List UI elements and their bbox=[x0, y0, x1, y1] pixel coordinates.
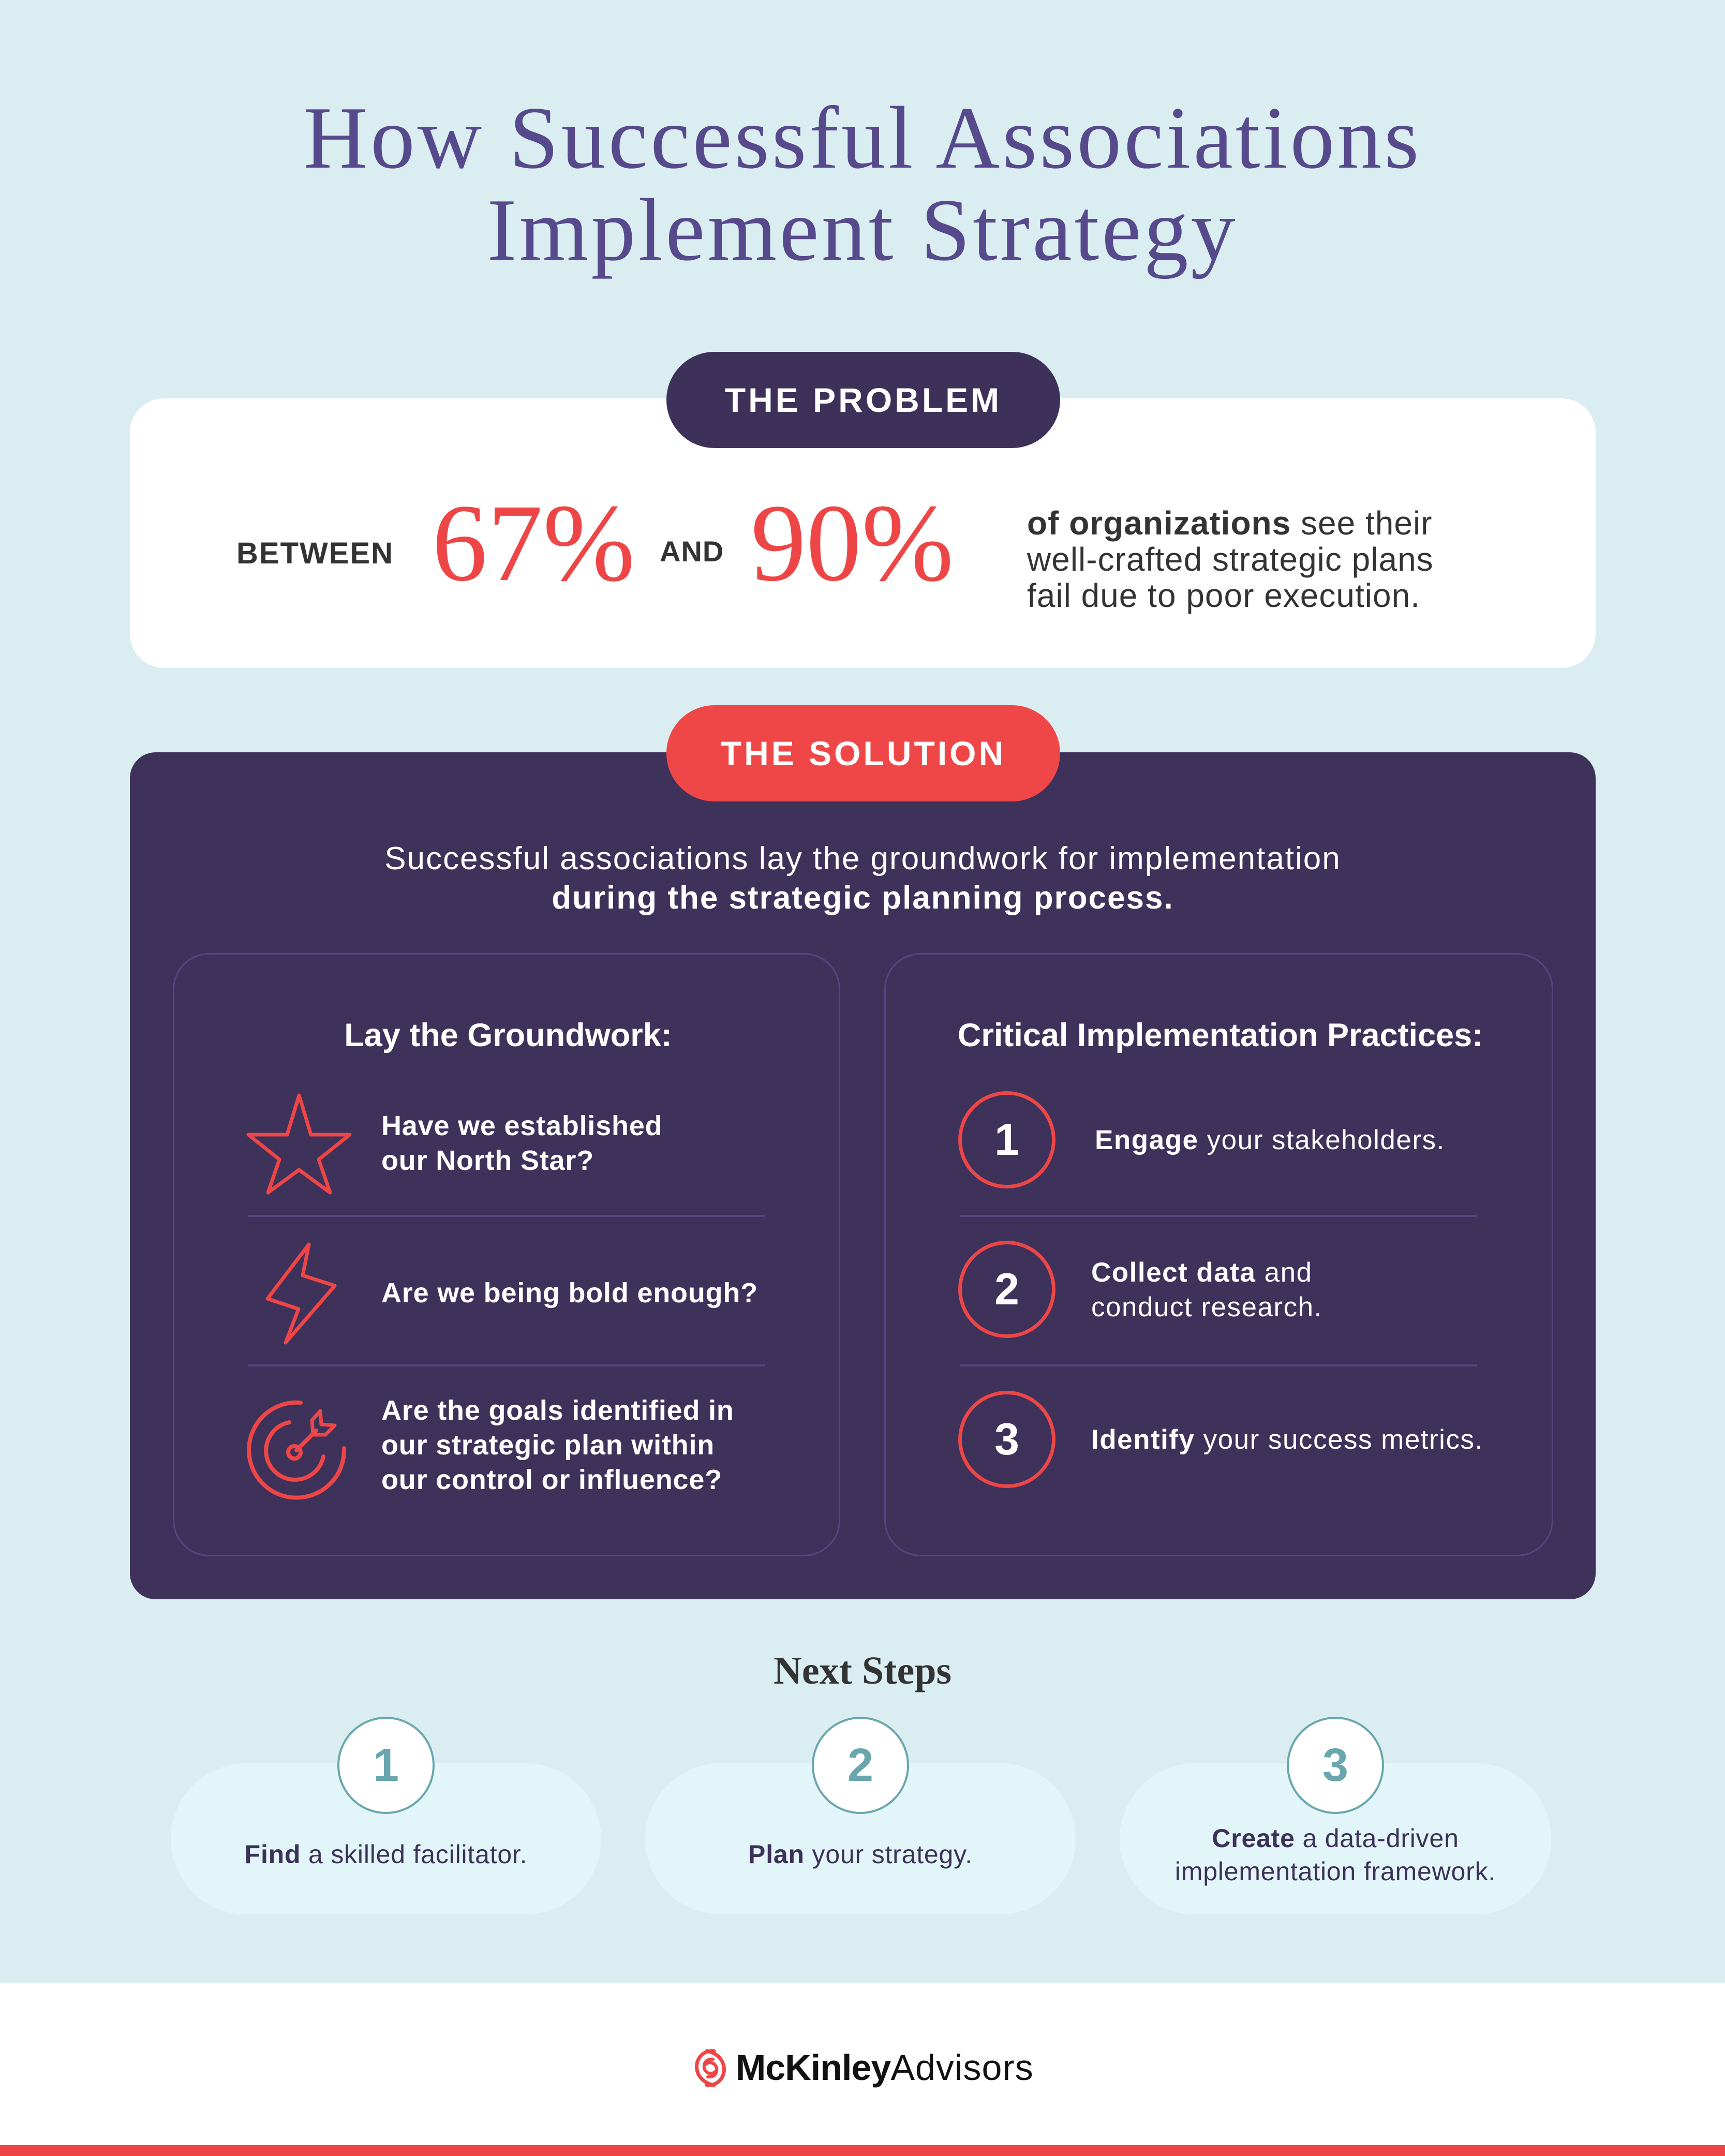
pill: step 2 bbox=[645, 1763, 1076, 1914]
heading: next steps: Next Steps bbox=[774, 1649, 951, 1692]
solution intro text: Successful associations lay the groundwork for implementation bbox=[384, 841, 1341, 876]
panel: lay the groundwork bbox=[173, 953, 840, 1556]
badge: the problem: THE PROBLEM bbox=[725, 381, 1002, 419]
number circle: step 3 bbox=[1287, 1717, 1384, 1814]
text: north star question bbox=[381, 1110, 662, 1176]
text: goals question bbox=[381, 1395, 734, 1495]
footer bbox=[0, 1983, 1725, 2156]
badge: the problem bbox=[666, 352, 1060, 448]
panel: the solution bbox=[130, 752, 1596, 1599]
number circle 1 bbox=[958, 1091, 1055, 1188]
text: goals question: our control or influence? bbox=[381, 1464, 722, 1495]
text: goals question: our strategic plan within bbox=[381, 1430, 715, 1461]
text: engage: Engage your stakeholders. bbox=[1095, 1125, 1445, 1155]
title: How Successful Associations bbox=[304, 89, 1421, 187]
icon: swirl bbox=[693, 2049, 727, 2087]
label: and: AND bbox=[660, 535, 724, 568]
stat: 67%: 67% bbox=[432, 482, 635, 604]
number circle: step 3: 3 bbox=[1322, 1739, 1348, 1791]
item: goals within control bbox=[247, 1395, 734, 1500]
icon: target bbox=[247, 1400, 347, 1500]
text: identify: Identify your success metrics. bbox=[1091, 1424, 1483, 1455]
panel: the problem bbox=[130, 398, 1596, 668]
item: bold enough bbox=[266, 1243, 758, 1344]
title: Implement Strategy bbox=[487, 181, 1238, 279]
number circle 3 bbox=[958, 1391, 1055, 1488]
item: north star bbox=[246, 1094, 662, 1194]
icon: star bbox=[246, 1094, 352, 1194]
label: between: BETWEEN bbox=[236, 537, 394, 570]
heading: lay the groundwork: Lay the Groundwork: bbox=[344, 1017, 672, 1053]
logo bbox=[694, 2047, 1034, 2088]
practice 1 bbox=[958, 1091, 1445, 1188]
number circle 2 bbox=[958, 1241, 1055, 1338]
logo wordmark: McKinleyAdvisors bbox=[736, 2047, 1034, 2088]
text: bold enough question: Are we being bold enough? bbox=[381, 1277, 758, 1309]
pill: step 3 bbox=[1120, 1763, 1551, 1914]
step 1 bbox=[245, 1717, 527, 1869]
text: step 3: Create a data-driven bbox=[1212, 1824, 1459, 1853]
text: step 3 bbox=[1175, 1824, 1496, 1886]
badge: the solution: THE SOLUTION bbox=[721, 734, 1006, 772]
stat: 90%: 90% bbox=[751, 482, 954, 604]
panel: critical implementation practices bbox=[884, 953, 1553, 1556]
solution intro text bbox=[384, 841, 1341, 916]
badge: the solution bbox=[666, 705, 1060, 801]
text: step 2: Plan your strategy. bbox=[748, 1840, 973, 1869]
practice 2 bbox=[958, 1241, 1322, 1338]
heading: critical implementation practices: Critical Implementation Practices: bbox=[958, 1017, 1483, 1053]
text: goals question: Are the goals identified in bbox=[381, 1395, 734, 1426]
icon: lightning bolt bbox=[266, 1243, 336, 1344]
number circle 1: 1 bbox=[994, 1115, 1019, 1165]
problem description: of organizations see their bbox=[1027, 504, 1432, 542]
number circle: step 2 bbox=[812, 1717, 909, 1814]
number circle 2: 2 bbox=[994, 1265, 1019, 1314]
text: step 3: implementation framework. bbox=[1175, 1857, 1496, 1886]
pill: step 1 bbox=[171, 1763, 601, 1914]
text: step 1: Find a skilled facilitator. bbox=[245, 1840, 527, 1869]
number circle: step 1: 1 bbox=[373, 1739, 399, 1791]
practice 3 bbox=[958, 1391, 1483, 1488]
title bbox=[304, 89, 1421, 279]
number circle: step 2: 2 bbox=[847, 1739, 873, 1791]
problem description: fail due to poor execution. bbox=[1027, 577, 1420, 614]
problem description bbox=[1027, 504, 1434, 614]
text: collect data: conduct research. bbox=[1091, 1292, 1322, 1322]
text: collect data: Collect data and bbox=[1091, 1257, 1313, 1288]
solution intro text: during the strategic planning process. bbox=[552, 880, 1174, 916]
text: collect data bbox=[1091, 1257, 1322, 1322]
text: north star question: our North Star? bbox=[381, 1145, 594, 1176]
step 3 bbox=[1175, 1717, 1496, 1886]
text: north star question: Have we established bbox=[381, 1110, 662, 1141]
number circle: step 1 bbox=[337, 1717, 435, 1814]
step 2 bbox=[748, 1717, 973, 1869]
problem description: well-crafted strategic plans bbox=[1027, 541, 1434, 578]
number circle 3: 3 bbox=[994, 1415, 1019, 1464]
